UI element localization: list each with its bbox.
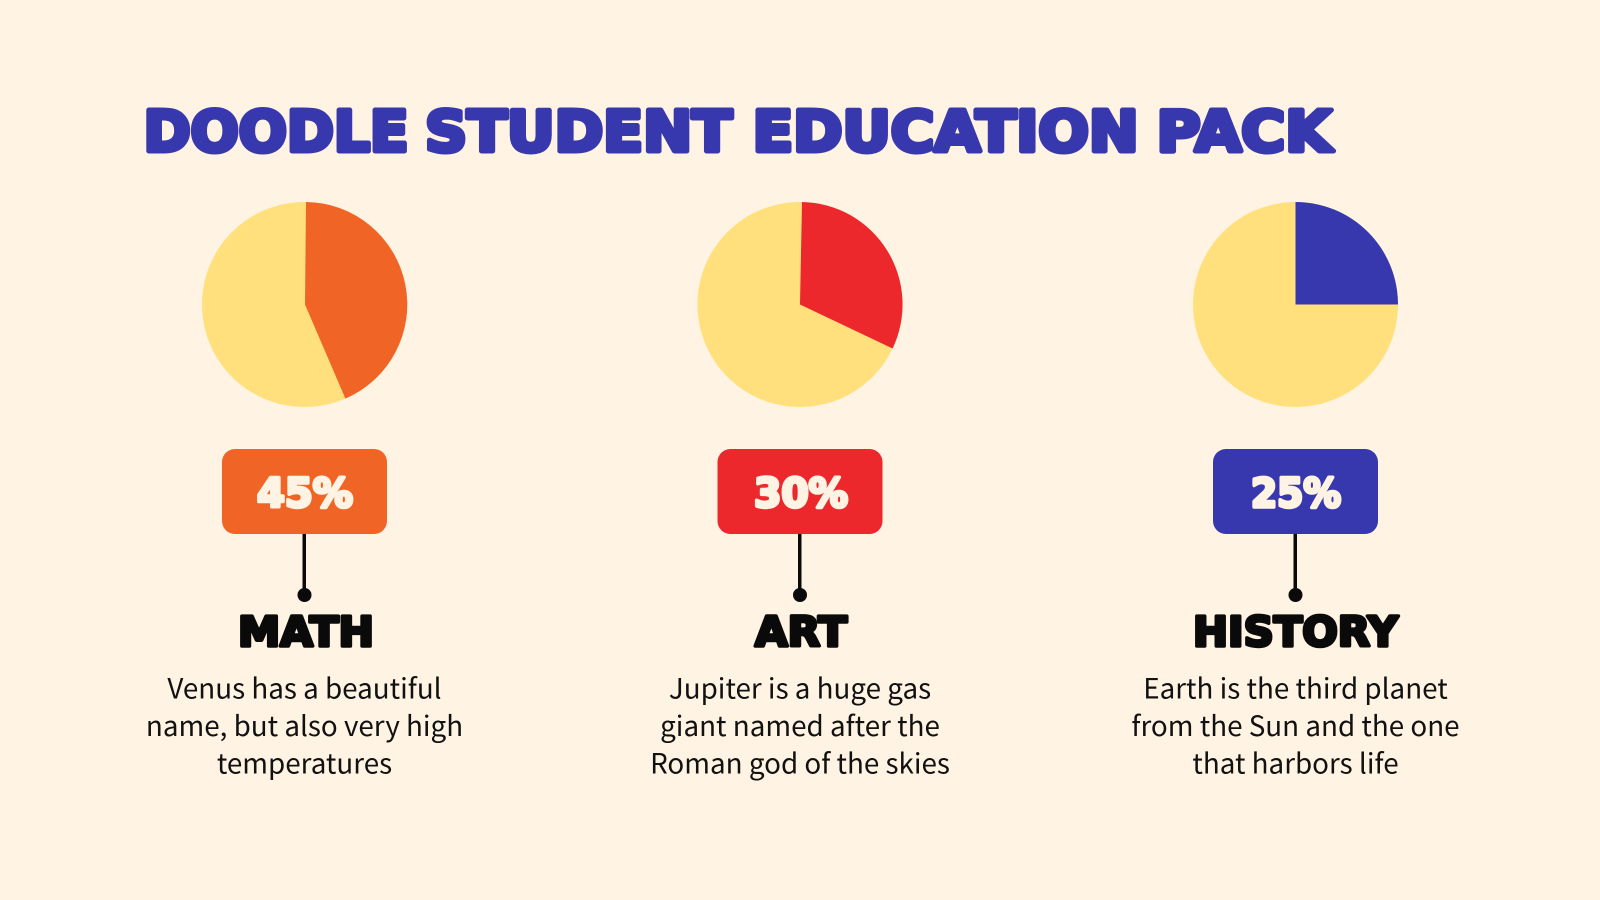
subject heading: math: MATH: [238, 608, 374, 656]
connector line with dot: [298, 534, 312, 602]
description: math: name, but also very high: [146, 705, 463, 745]
panel: history: [1131, 202, 1460, 782]
title: PACK: [1157, 100, 1334, 165]
title: [144, 100, 1334, 165]
badge: 45%: [222, 449, 387, 534]
badge: 30%: 30%: [754, 471, 848, 517]
badge: 45%: 45%: [257, 471, 353, 517]
description: history: from the Sun and the one: [1131, 705, 1460, 745]
panel: math: [146, 202, 463, 782]
badge: 25%: [1213, 449, 1378, 534]
badge: 30%: [718, 449, 882, 534]
description: art: Roman god of the skies: [650, 742, 950, 782]
title: STUDENT: [425, 100, 732, 165]
pie chart: art 30%: [698, 202, 903, 407]
subject heading: history: HISTORY: [1193, 608, 1399, 656]
connector line with dot: [793, 534, 807, 602]
description: art: giant named after the: [660, 705, 940, 745]
connector line with dot: [1288, 534, 1302, 602]
description: art: Jupiter is a huge gas: [669, 668, 931, 708]
pie chart: history 25%: [1193, 202, 1398, 407]
badge: 25%: 25%: [1251, 471, 1341, 517]
description: math: temperatures: [217, 742, 392, 782]
panel: art: [650, 202, 950, 782]
description: history: that harbors life: [1192, 742, 1399, 782]
subject heading: art: ART: [755, 608, 847, 656]
description: math: Venus has a beautiful: [167, 668, 442, 708]
description: history: Earth is the third planet: [1143, 668, 1448, 708]
title: EDUCATION: [753, 100, 1139, 165]
title: DOODLE: [144, 100, 409, 165]
pie chart: math 45%: [202, 202, 407, 407]
